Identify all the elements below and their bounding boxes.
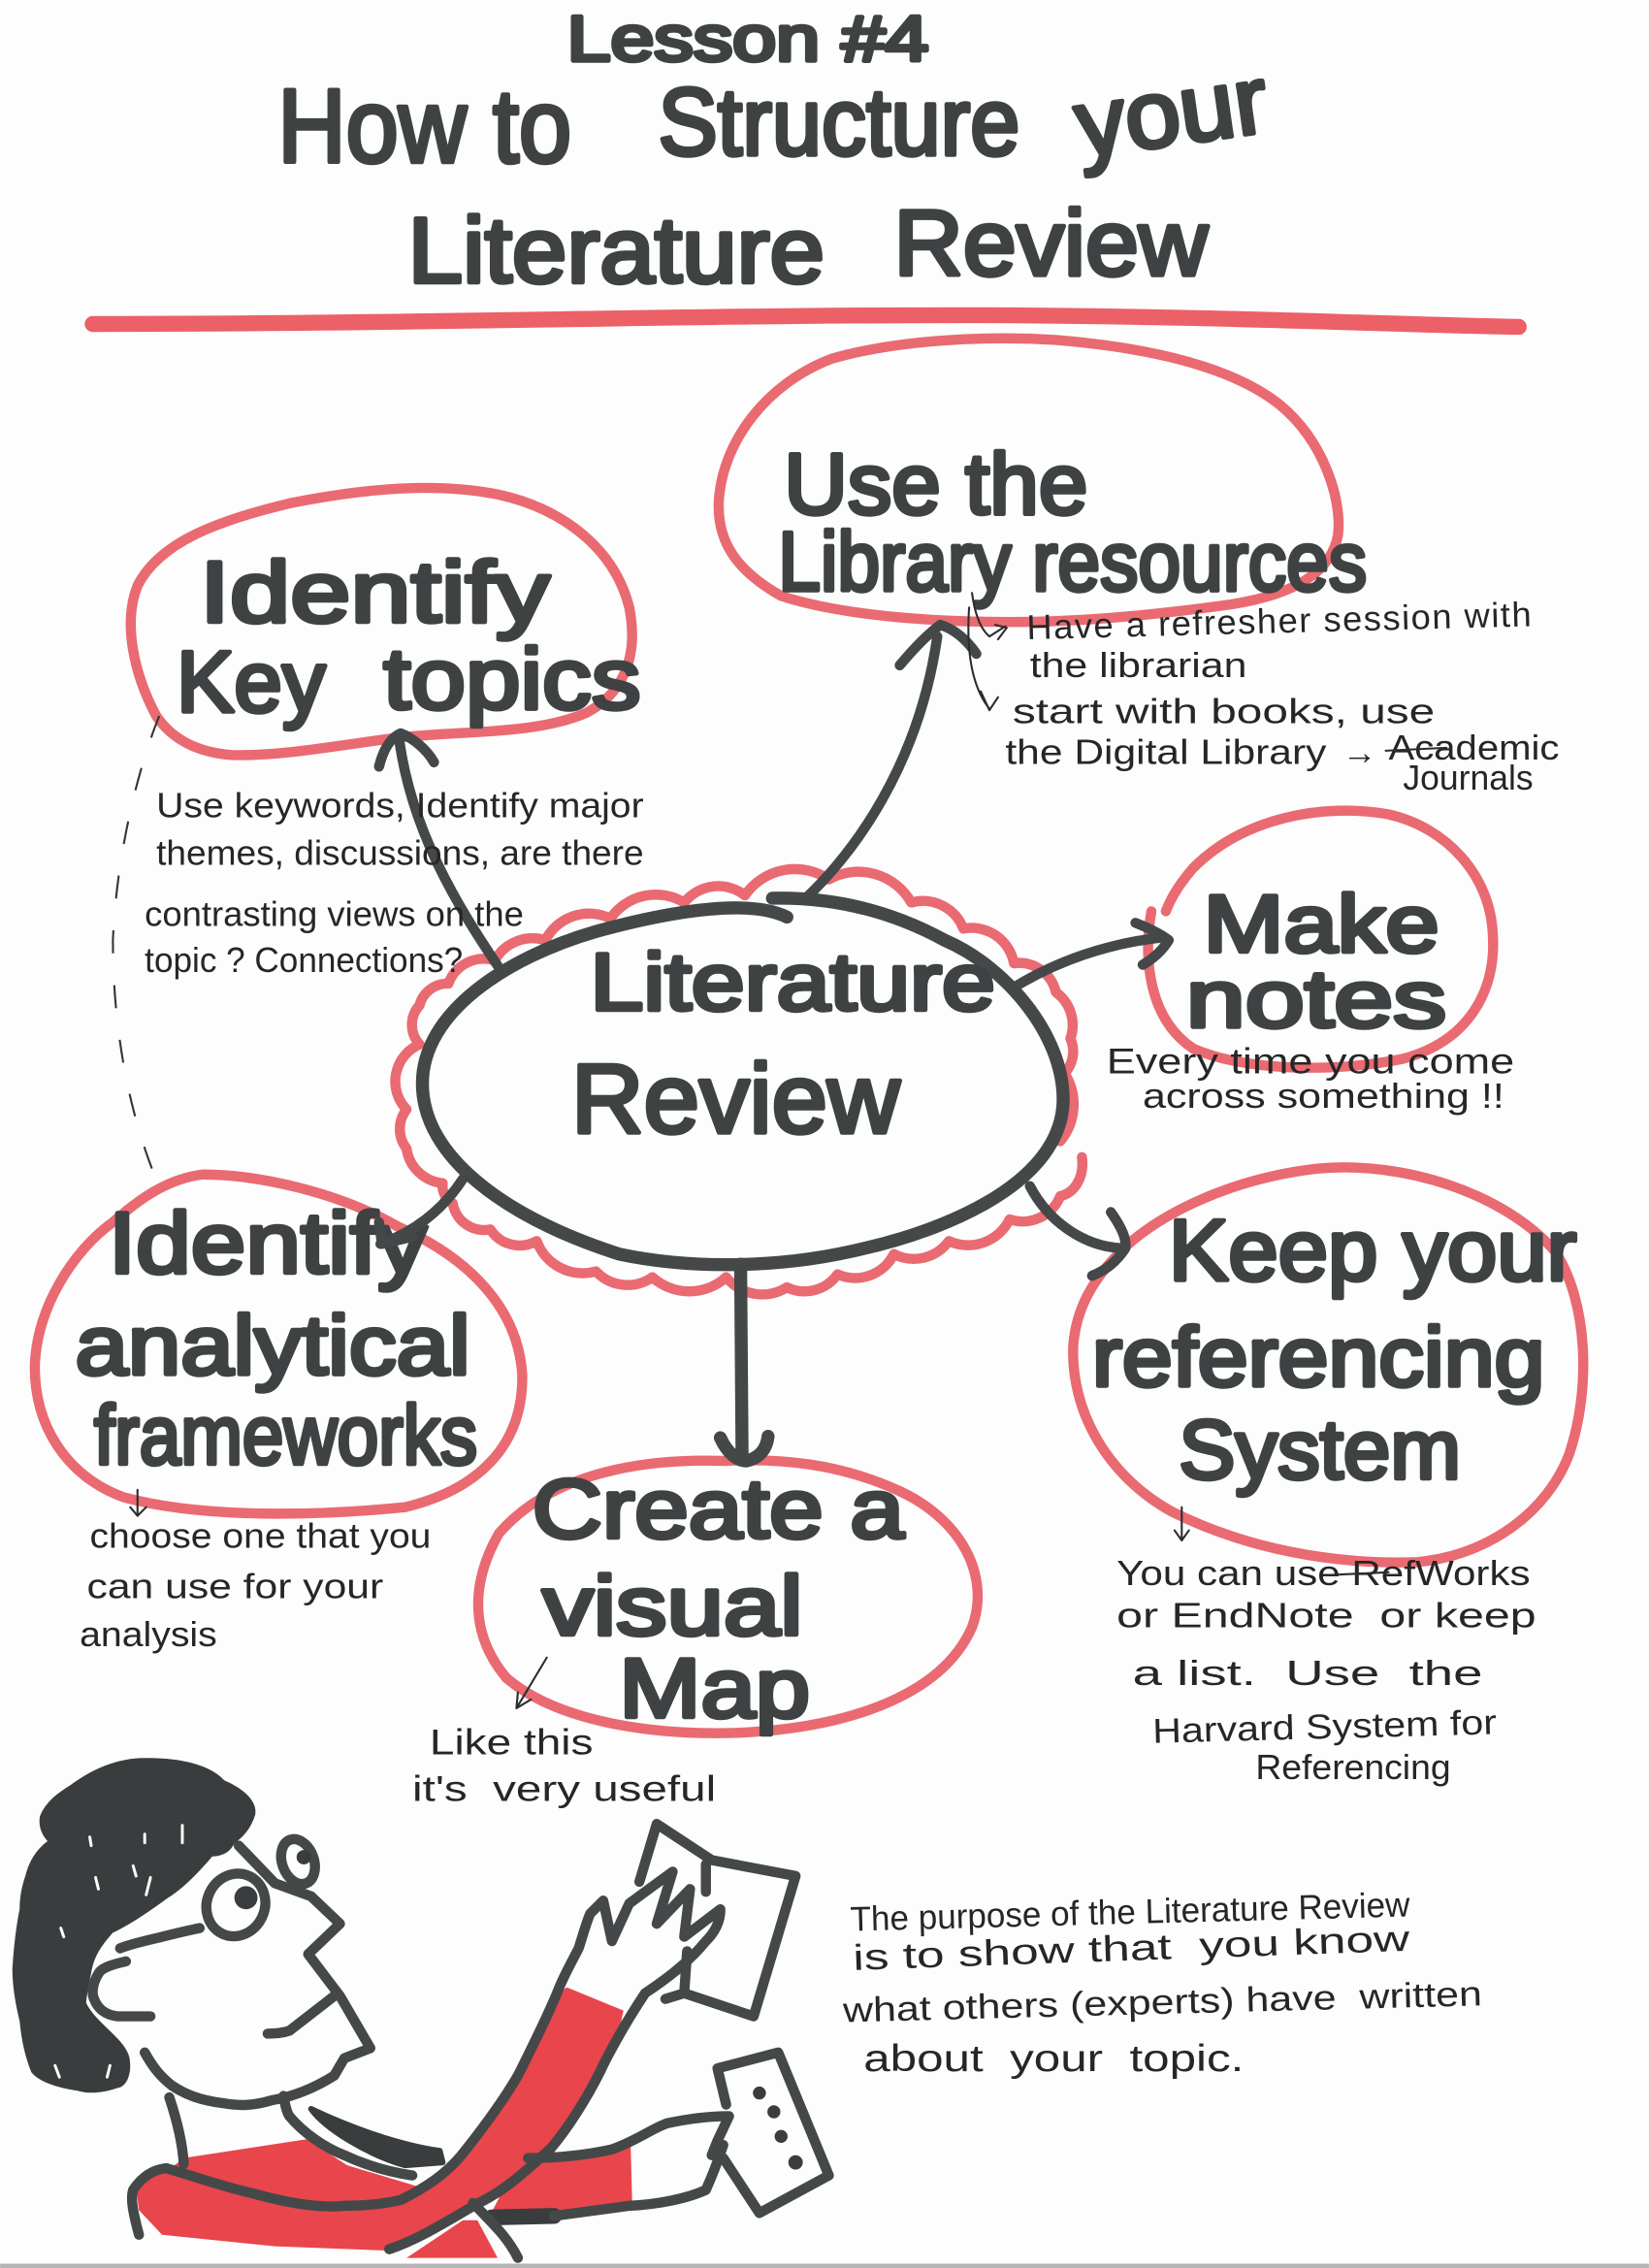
bubble [719, 339, 1339, 622]
label [1092, 1202, 1576, 1497]
notes: a list. Use the [1133, 1654, 1482, 1693]
notes: Academic [1389, 729, 1559, 767]
lower paper with dots [718, 2053, 828, 2213]
title line 2: Review [894, 192, 1209, 295]
label: Create a [533, 1463, 905, 1556]
panel: central literature review bubble [396, 869, 1083, 1294]
hair [15, 1760, 253, 2090]
notes: the librarian [1030, 646, 1246, 685]
panel: make notes [1016, 811, 1514, 1116]
small arrow [516, 1658, 547, 1708]
title line 1 [277, 46, 1274, 184]
notes [145, 786, 644, 980]
title line 1: your [1069, 46, 1274, 178]
notes [412, 1722, 716, 1808]
purpose statement: is to show that you know [853, 1918, 1410, 1978]
title line 2 [408, 192, 1209, 303]
notes: Journals [1403, 759, 1534, 797]
purpose statement: The purpose of the Literature Review [850, 1885, 1410, 1939]
label: Map [619, 1642, 810, 1735]
arrow to key topics [379, 733, 501, 972]
raised arm and hand [132, 1871, 721, 2250]
label [1186, 878, 1446, 1045]
scalloped red outline [396, 869, 1083, 1294]
arrow to library [804, 625, 977, 899]
purpose statement: what others (experts) have written [841, 1974, 1482, 2030]
notes: it's very useful [412, 1767, 716, 1808]
small arrow [1175, 1507, 1189, 1540]
label: Identify [200, 543, 550, 640]
title [277, 4, 1274, 303]
label: referencing [1092, 1311, 1545, 1404]
notes [1116, 1554, 1536, 1787]
label: Make [1204, 878, 1439, 969]
notes: or EndNote or keep [1116, 1596, 1536, 1635]
notes: topic ? Connections? [145, 941, 463, 980]
label [533, 1463, 905, 1735]
title line 1: How to [277, 68, 571, 184]
notes: Harvard System for [1152, 1702, 1498, 1751]
panel: identify key topics [131, 488, 644, 980]
panel: use the library resources [719, 339, 1559, 899]
arrow to referencing [1030, 1186, 1125, 1276]
bubble [1073, 1167, 1583, 1563]
label: visual [542, 1560, 803, 1653]
notes: Have a refresher session with [1026, 595, 1534, 647]
label: frameworks [94, 1389, 477, 1482]
illustration: person reading [15, 1760, 828, 2258]
label: Use the [784, 435, 1087, 532]
central label: Review [571, 1045, 900, 1154]
small arrows [968, 593, 1007, 710]
label: Keep your [1169, 1202, 1576, 1299]
label [76, 1194, 477, 1482]
dashed connector between key topics and frameworks [113, 716, 162, 1193]
notes: start with books, use [1013, 693, 1435, 731]
label: analytical [76, 1300, 470, 1393]
bubble [478, 1460, 978, 1733]
face and glasses [93, 1834, 371, 2105]
arrow to frameworks [379, 1179, 463, 1244]
label: System [1179, 1404, 1461, 1497]
arrow to make notes [1016, 923, 1169, 987]
title divider line [93, 315, 1519, 327]
notes: the Digital Library [1005, 732, 1327, 771]
panel: identify analytical frameworks [35, 1175, 522, 1654]
notes: analysis [80, 1615, 217, 1654]
purpose statement: about your topic. [863, 2038, 1244, 2080]
notes: Every time you come [1107, 1040, 1514, 1081]
notes: choose one that you [90, 1516, 431, 1555]
label: notes [1186, 954, 1446, 1045]
label: Key [177, 633, 326, 730]
lesson number: Lesson #4 [567, 4, 928, 75]
title line 1: Structure [659, 69, 1019, 176]
lower arm [528, 2116, 729, 2206]
notes [80, 1516, 431, 1654]
arrow to visual map [721, 1264, 768, 1461]
bubble [1148, 811, 1493, 1068]
bubble [35, 1175, 522, 1513]
label [177, 543, 641, 730]
notes: across something !! [1143, 1077, 1504, 1116]
black ellipse outline [422, 898, 1063, 1265]
panel: create a visual map [412, 1264, 978, 1808]
notes: You can use RefWorks [1116, 1554, 1531, 1593]
central label: Literature [590, 936, 995, 1027]
central label [571, 936, 995, 1154]
label: Library resources [778, 515, 1367, 608]
title line 2: Literature [408, 200, 824, 303]
label: Identify [109, 1194, 427, 1291]
notes: themes, discussions, are there [156, 834, 644, 873]
neck and collar [170, 2096, 442, 2176]
notes: → [1342, 732, 1377, 771]
notes [1107, 1040, 1514, 1116]
notes: contrasting views on the [145, 894, 524, 933]
notes: Use keywords, Identify major [156, 786, 644, 825]
small arrow [130, 1490, 146, 1516]
upper paper [639, 1824, 795, 2017]
panel: keep your referencing system [1030, 1167, 1583, 1787]
notes [1005, 595, 1559, 797]
label [778, 435, 1367, 608]
notes: Like this [430, 1722, 593, 1763]
bubble [131, 488, 632, 755]
label: topics [383, 631, 641, 728]
notes: Referencing [1255, 1748, 1451, 1787]
notes: can use for your [87, 1568, 383, 1606]
purpose statement [841, 1885, 1482, 2080]
red clothing washes [136, 1988, 632, 2258]
